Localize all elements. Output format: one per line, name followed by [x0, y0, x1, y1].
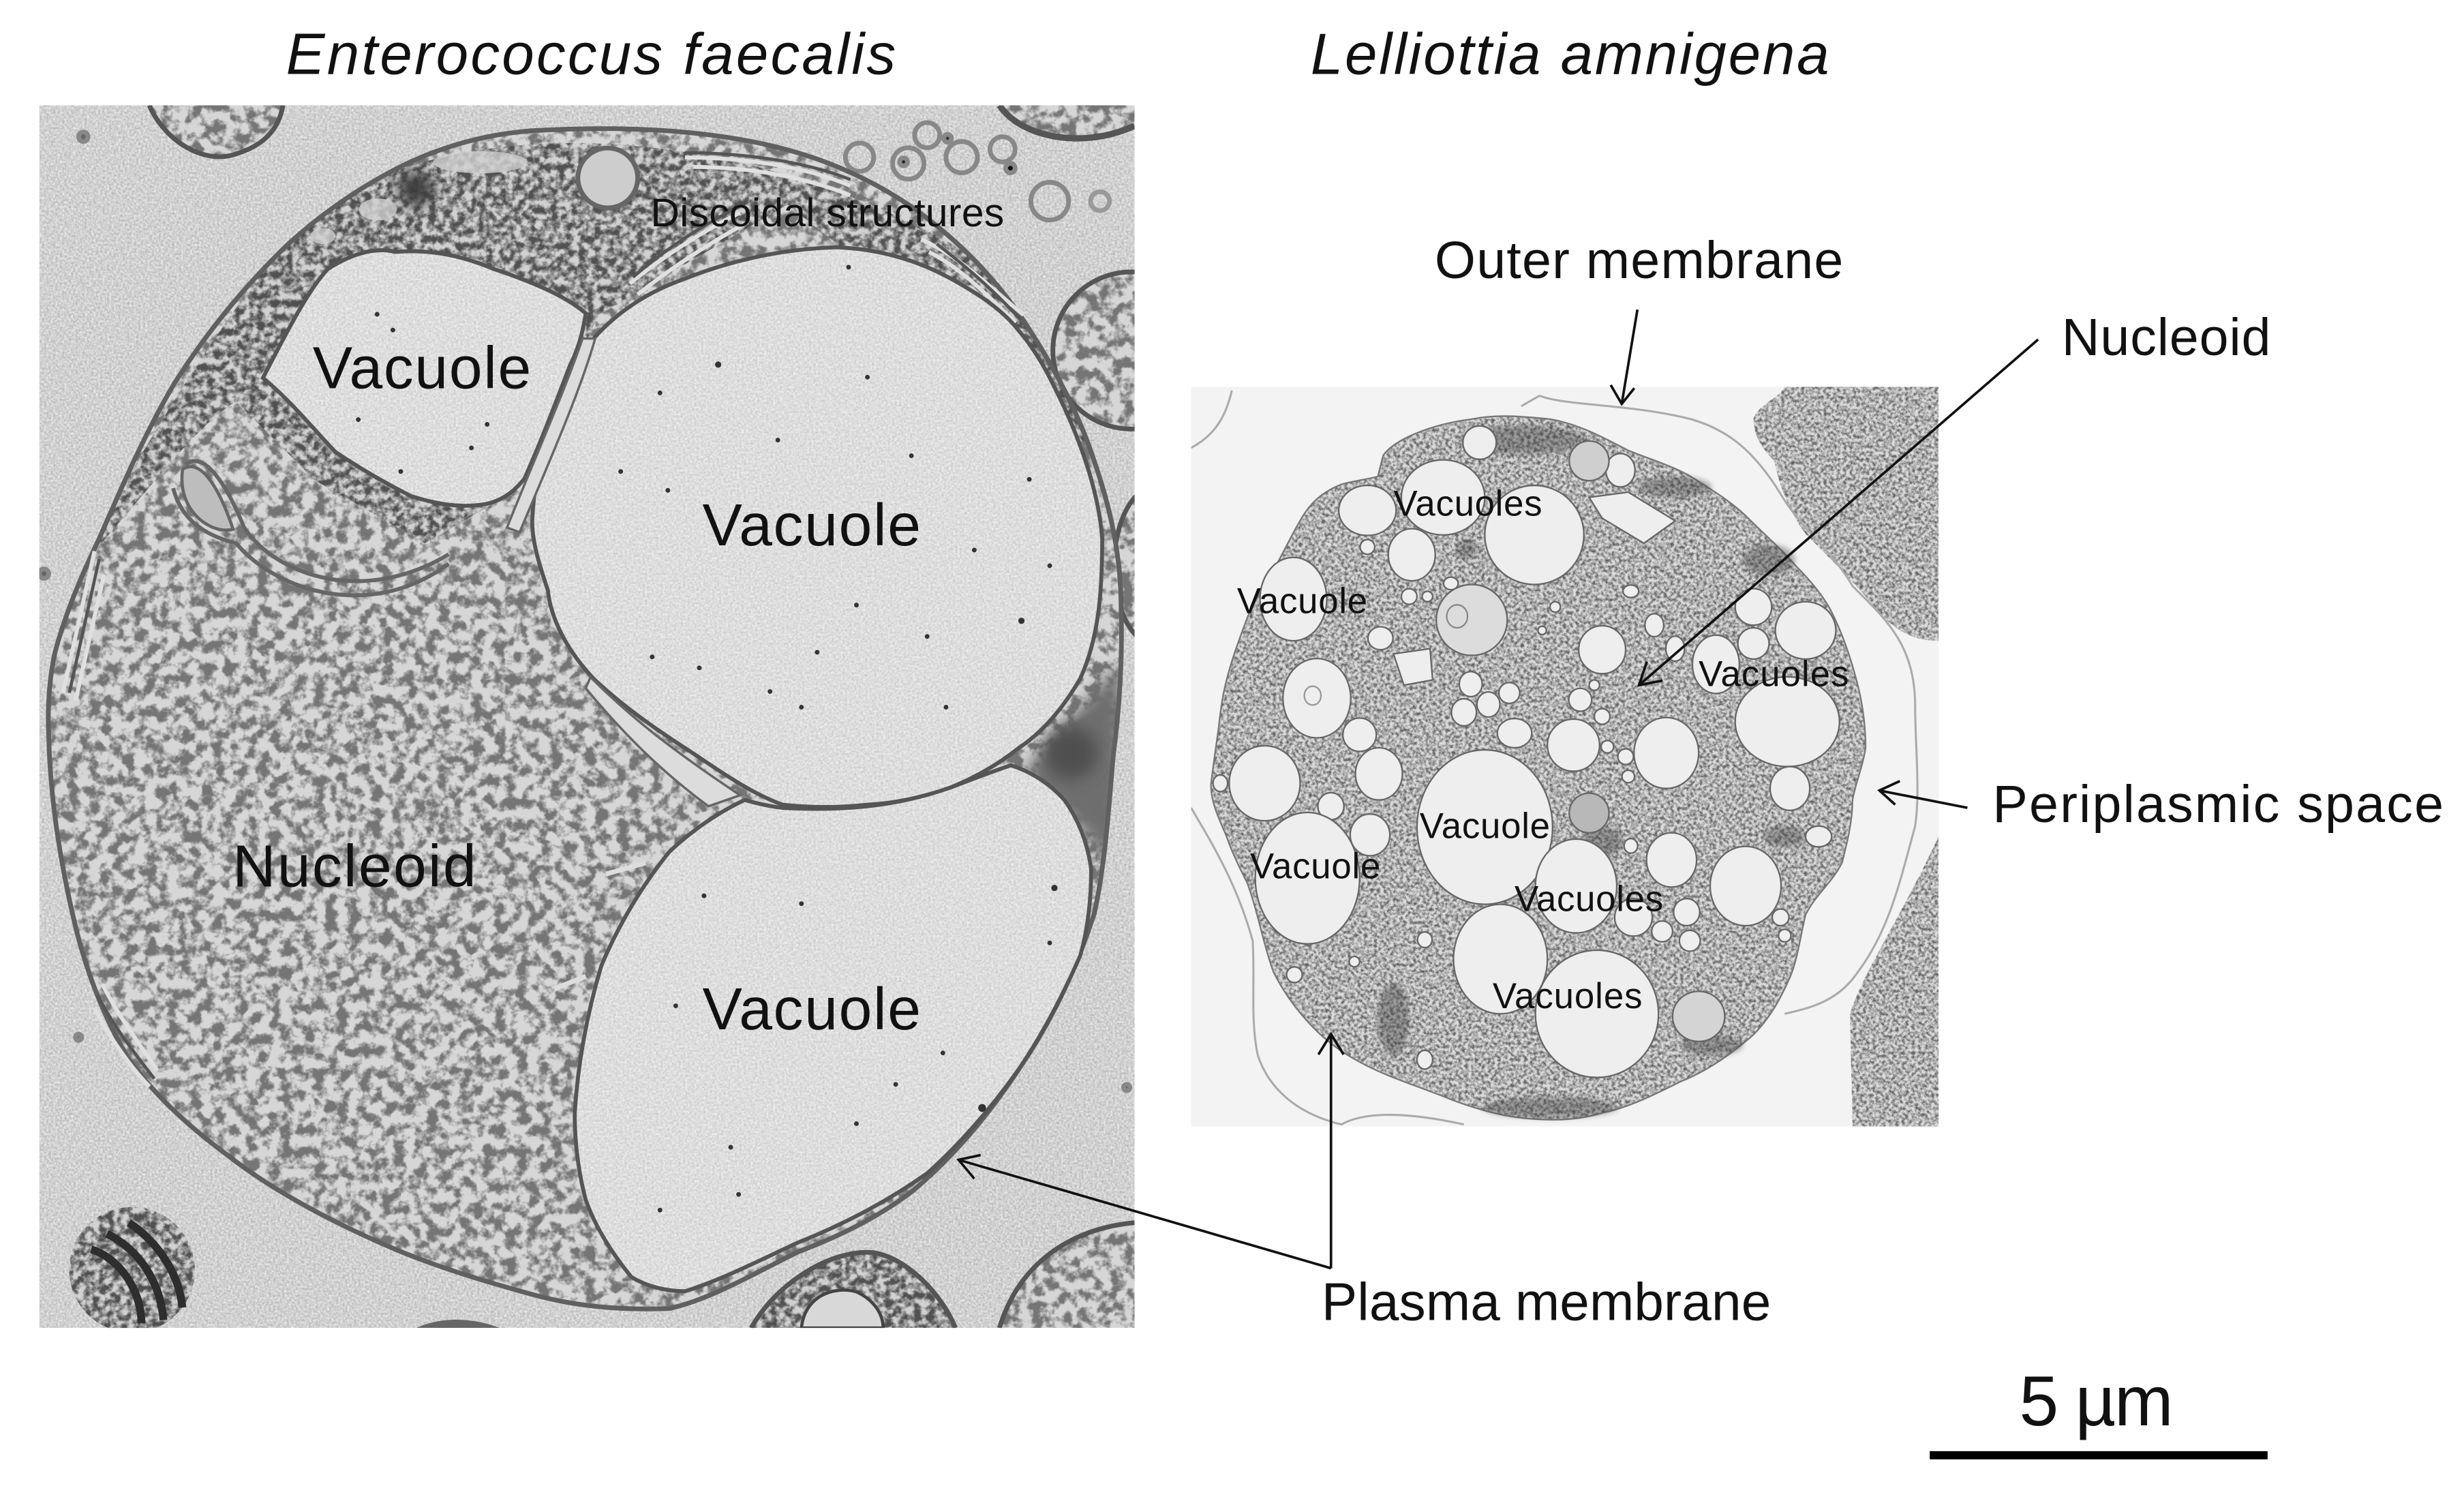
label: Vacuoles centre: Vacuoles [1515, 879, 1663, 920]
debris [40, 123, 1130, 1091]
label: Vacuole upper left: Vacuole [313, 334, 531, 401]
vacuole: lower [575, 765, 1091, 1291]
membrane loop [182, 467, 233, 530]
label: Nucleoid: Nucleoid [232, 832, 476, 899]
gap between vacuoles and nucleoid [507, 339, 740, 806]
label: Discoidal structures: Discoidal structures [650, 191, 1004, 235]
vacuole specks [356, 264, 1058, 1213]
label: Vacuole lower: Vacuole [703, 975, 921, 1042]
cell body [1211, 416, 1866, 1120]
small round inclusion [578, 148, 638, 208]
label: Vacuole centre: Vacuole [1420, 806, 1550, 846]
outer membrane [1191, 391, 1917, 1125]
cytoplasm band, upper cell [98, 143, 1085, 547]
scale bar [1930, 1451, 2268, 1459]
vacuole: upper left [263, 250, 585, 506]
cell body [46, 126, 1124, 1312]
label: Plasma membrane: Plasma membrane [1322, 1272, 1771, 1332]
label: Vacuole upper right: Vacuole [703, 491, 921, 558]
label: Vacuoles right: Vacuoles [1699, 654, 1849, 695]
arrow: Outer membrane [1611, 309, 1637, 404]
cytoplasm light lumens [310, 151, 528, 244]
vacuole: upper right [532, 247, 1102, 807]
scale label: 5 µm: 5 µm [2020, 1361, 2173, 1440]
dark cytoplasm patches [1378, 425, 1806, 1118]
label: Vacuoles bottom: Vacuoles [1493, 976, 1643, 1016]
label: Nucleoid right: Nucleoid [2062, 308, 2270, 367]
heading: Lelliottia amnigena: Lelliottia amnigena [1311, 22, 1829, 87]
arrows: Plasma membrane [958, 1034, 1343, 1269]
label: Outer membrane: Outer membrane [1435, 231, 1843, 290]
panel: Enterococcus faecalis micrograph [40, 105, 1135, 1328]
arrow: Periplasmic space [1879, 781, 1967, 808]
label: Vacuole lower left: Vacuole [1250, 846, 1380, 886]
discoidal structures [63, 157, 1024, 1087]
arrow: Nucleoid [1639, 339, 2038, 685]
neighbouring cells [1754, 386, 1938, 1127]
heading: Enterococcus faecalis: Enterococcus faecalis [286, 22, 896, 87]
label: Vacuoles top: Vacuoles [1393, 483, 1542, 524]
label: Vacuole left: Vacuole [1237, 581, 1367, 622]
vacuoles [1213, 426, 1840, 1078]
panel: Lelliottia amnigena micrograph [1191, 386, 1938, 1127]
label: Periplasmic space: Periplasmic space [1992, 775, 2444, 834]
